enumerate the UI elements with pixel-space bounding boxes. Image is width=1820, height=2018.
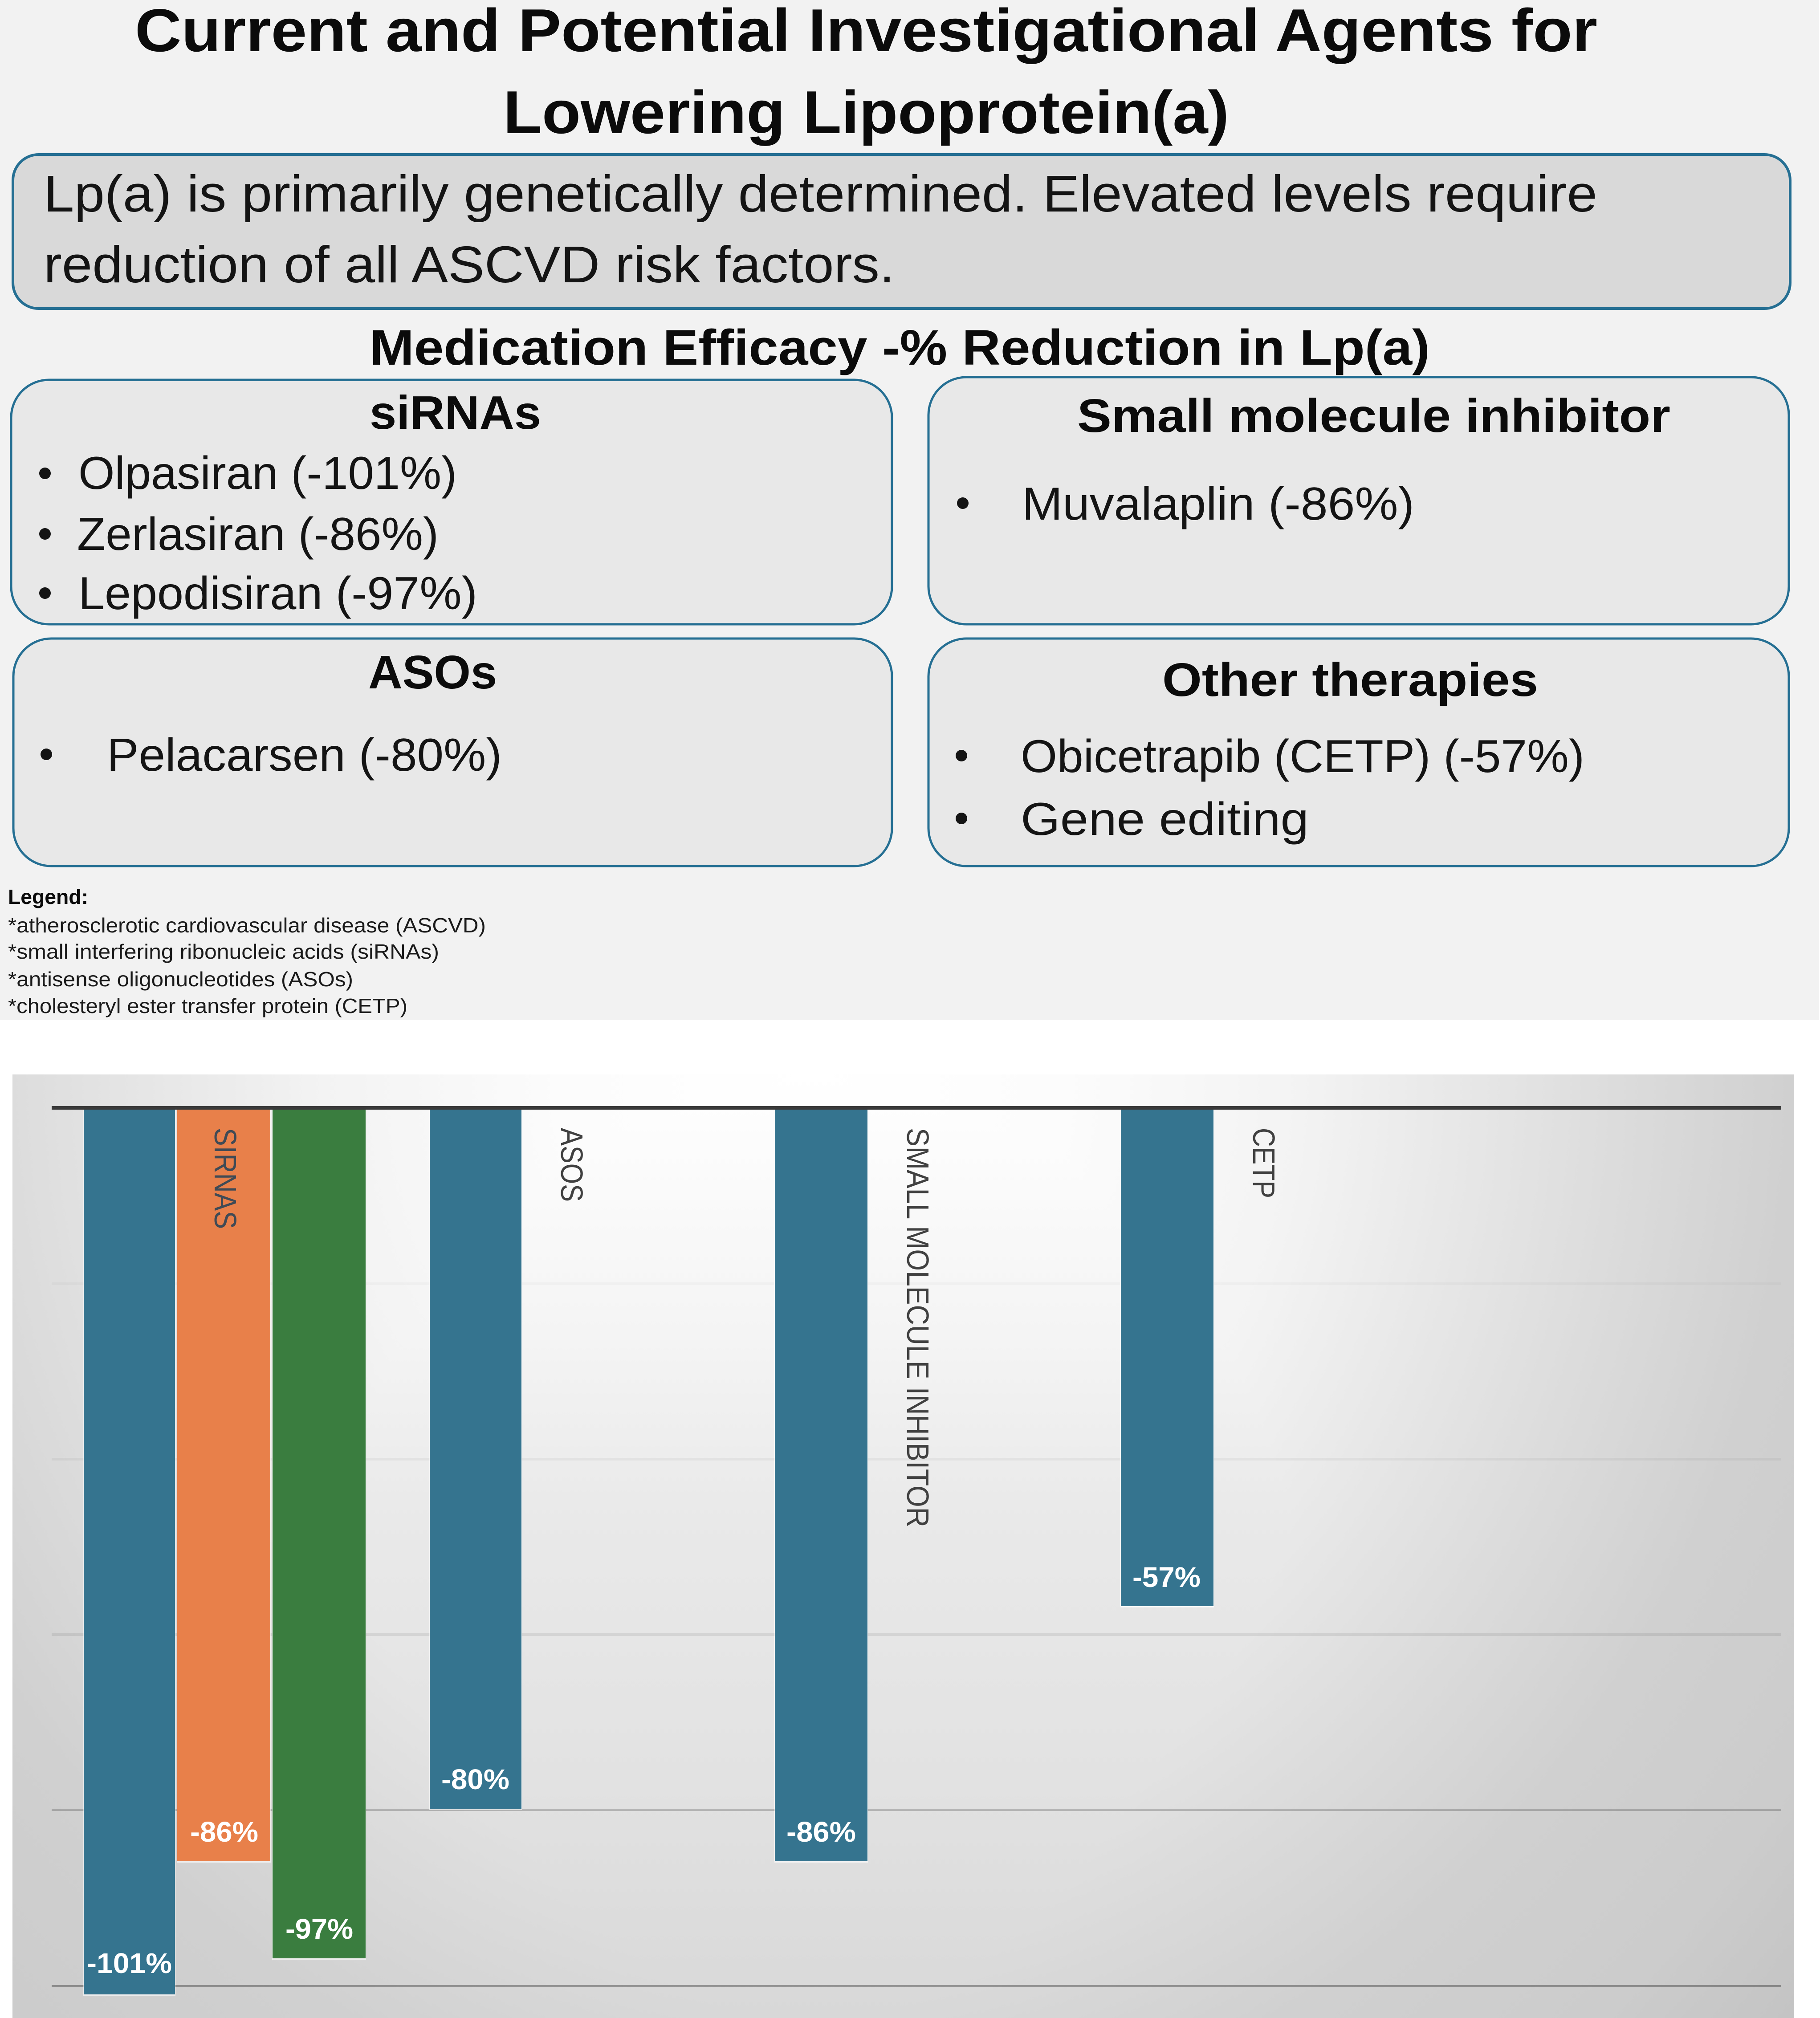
legend: *small interfering ribonucleic acids (siRNAs)	[8, 940, 439, 963]
legend: *antisense oligonucleotides (ASOs)	[8, 968, 353, 991]
callout: genetic determination: reduction of all ASCVD risk factors.	[44, 236, 895, 293]
bar: CETP -57%	[1120, 1108, 1214, 1607]
category label: small molecule inhibitor: SMALL MOLECULE INHIBITOR	[900, 1128, 935, 1527]
category label: CETP: CETP	[1246, 1128, 1281, 1198]
panel: ASOs	[13, 639, 892, 866]
legend	[8, 885, 486, 1017]
list: siRNA agents: Olpasiran (-101%)	[78, 448, 457, 499]
heading: siRNAs: siRNAs	[370, 387, 541, 439]
panel: small molecule inhibitor	[928, 377, 1789, 624]
bar: Lepodisiran -97%	[272, 1108, 366, 1960]
bar: Olpasiran -101%: -101%	[87, 1947, 172, 1979]
panel: other therapies	[928, 639, 1789, 866]
panel: summary of agents	[0, 0, 1819, 1020]
heading: other therapies: Other therapies	[1162, 654, 1538, 706]
bar chart: percent reduction in Lp(a)	[12, 1074, 1794, 2018]
bar: small molecule inhibitor -86%: -86%	[786, 1816, 856, 1848]
bar: ASOs -80%: -80%	[441, 1763, 509, 1795]
list: other therapies	[956, 731, 1584, 845]
list: other therapies: Gene editing	[1021, 793, 1309, 845]
bar: ASOs -80%	[429, 1108, 522, 1810]
callout: genetic determination	[13, 155, 1790, 309]
list: siRNA agents	[39, 448, 477, 619]
category label: siRNAs: SIRNAS	[208, 1128, 243, 1229]
bar: Lepodisiran -97%: -97%	[285, 1913, 353, 1945]
list: small molecule agents: Muvalaplin (-86%)	[1022, 478, 1414, 530]
list: other therapies: Obicetrapib (CETP) (-57%)	[1021, 731, 1584, 782]
heading: small molecule inhibitor: Small molecule inhibitor	[1077, 390, 1670, 442]
legend: *cholesteryl ester transfer protein (CETP)	[8, 994, 407, 1017]
list: siRNA agents: Zerlasiran (-86%)	[77, 509, 439, 560]
title	[135, 0, 1597, 146]
legend: Legend:	[8, 885, 88, 908]
heading: medication efficacy: Medication Efficacy -% Reduction in Lp(a)	[370, 320, 1430, 375]
axis line	[52, 1106, 1781, 1110]
list: siRNA agents: Lepodisiran (-97%)	[78, 568, 477, 619]
category label: ASOs: ASOS	[554, 1128, 589, 1202]
bar: Zerlasiran -86%: -86%	[190, 1816, 258, 1848]
bar: Olpasiran -101%	[83, 1108, 175, 1996]
callout: genetic determination: Lp(a) is primarily genetically determined. Elevated levels require	[44, 165, 1597, 223]
bar: Zerlasiran -86%	[177, 1108, 271, 1863]
legend: *atherosclerotic cardiovascular disease (ASCVD)	[8, 914, 486, 937]
bar: CETP -57%: -57%	[1132, 1561, 1201, 1593]
title: Lowering Lipoprotein(a)	[503, 78, 1229, 146]
heading: ASOs: ASOs	[368, 646, 497, 699]
list: ASO agents: Pelacarsen (-80%)	[107, 729, 502, 781]
panel: siRNAs	[11, 380, 892, 624]
bar: small molecule inhibitor -86%	[774, 1108, 868, 1863]
